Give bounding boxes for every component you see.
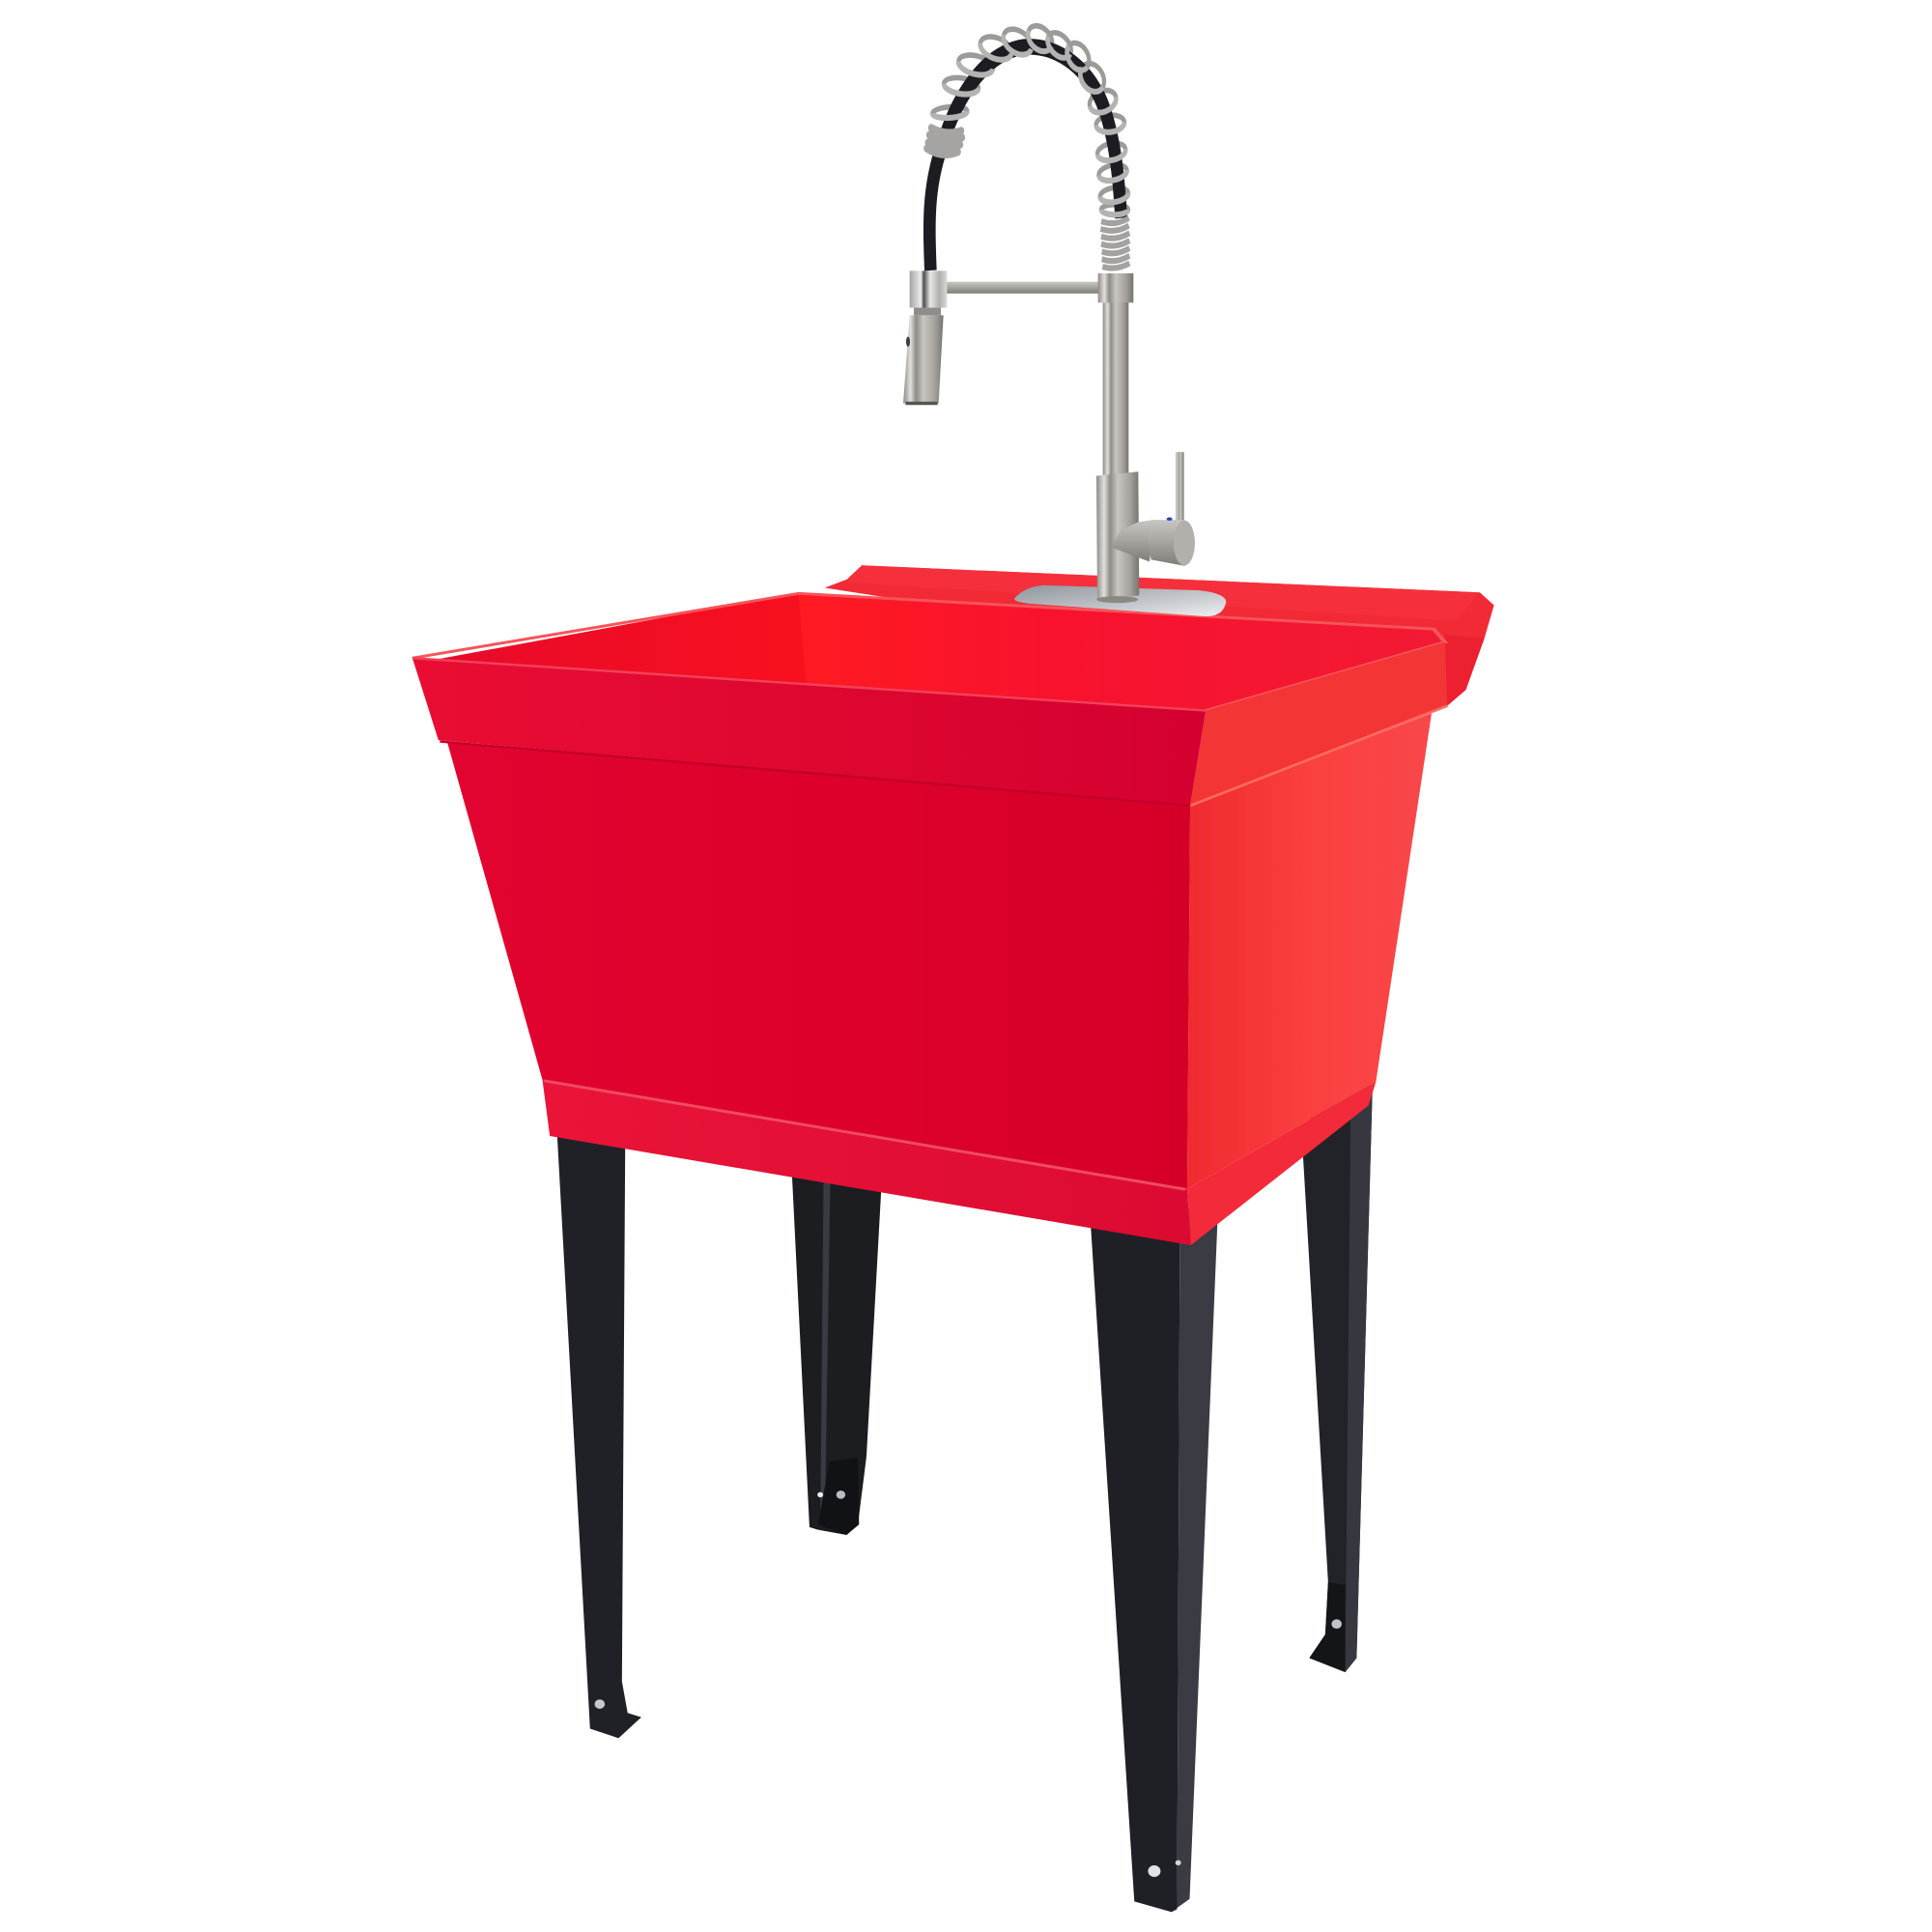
back middle leg <box>790 1148 883 1535</box>
lower compressed spring <box>1100 218 1129 269</box>
front centre leg <box>1089 1179 1219 1912</box>
basin back wall <box>799 592 1445 711</box>
sprayer head <box>903 308 944 405</box>
right rim band <box>1190 642 1447 806</box>
right leg <box>1301 1085 1373 1672</box>
back deck <box>825 565 1494 706</box>
rim top lip <box>412 593 1445 711</box>
front left leg <box>555 1111 641 1738</box>
bottom band right <box>1187 1082 1376 1245</box>
bottom band front <box>542 1080 1191 1245</box>
sink tub <box>412 565 1494 1245</box>
deck plate <box>1014 585 1226 616</box>
column <box>1103 301 1128 478</box>
faucet body <box>1096 471 1139 603</box>
front body panel <box>447 743 1190 1189</box>
upper compressed spring <box>926 128 962 155</box>
lever handle <box>1176 452 1184 521</box>
front rim band <box>412 658 1206 806</box>
right collar <box>1098 273 1133 302</box>
basin left wall <box>431 592 810 687</box>
front spring coils <box>932 20 1128 214</box>
left collar <box>910 270 947 308</box>
right outer side of tub <box>1187 713 1432 1189</box>
horizontal arm <box>946 282 1109 294</box>
black hose <box>929 46 1122 270</box>
rear spring coils <box>932 20 1128 214</box>
faucet <box>903 20 1226 616</box>
legs group <box>555 1085 1373 1912</box>
valve cartridge <box>1111 518 1195 566</box>
